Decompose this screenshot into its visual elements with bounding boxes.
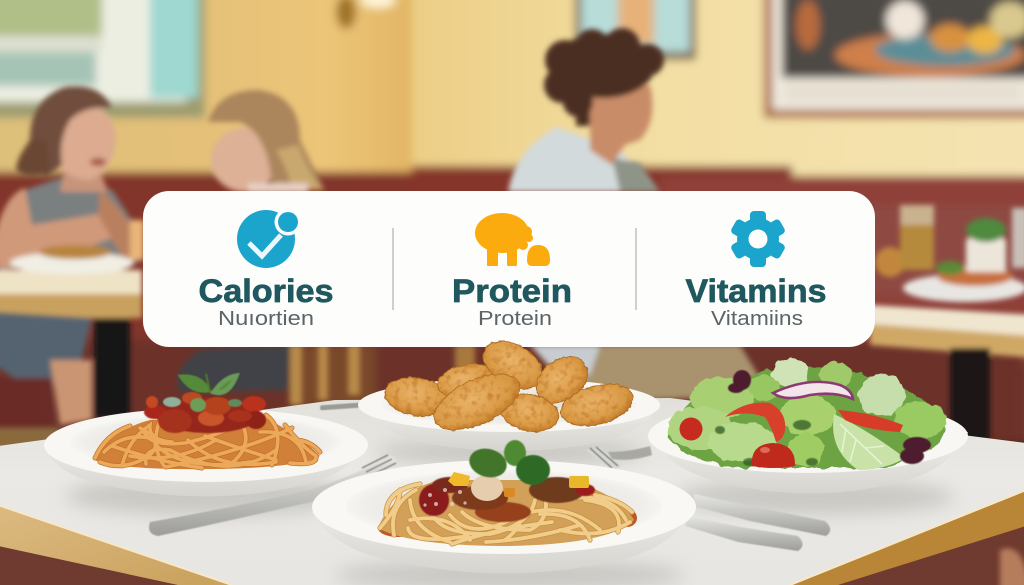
plate: spaghetti front	[312, 440, 696, 574]
heading: protein: Protein	[452, 273, 572, 309]
radicchio	[728, 370, 931, 464]
spaghetti mound	[94, 415, 320, 469]
large painting	[764, 0, 1024, 118]
background child left	[0, 178, 140, 270]
soft shadows under plates	[65, 438, 955, 585]
nugget	[528, 348, 596, 412]
pale lettuce leaf	[833, 414, 905, 470]
plate: green salad	[648, 358, 968, 494]
under panel left table	[0, 270, 142, 296]
nugget	[382, 373, 452, 421]
wainscot	[0, 172, 412, 372]
foreground boy	[508, 127, 660, 192]
label: protein: Protein	[478, 307, 552, 330]
cherry tomatoes	[680, 418, 702, 440]
nugget	[434, 358, 496, 402]
column: vitamins	[686, 211, 826, 330]
label: nutrient: Nuıortien	[218, 307, 314, 330]
nugget	[475, 332, 551, 398]
background child middle	[211, 128, 277, 192]
red onion ring	[773, 382, 853, 399]
tomato sauce	[144, 392, 266, 433]
icon: calories check circle	[237, 208, 302, 268]
window	[0, 0, 205, 118]
salad greens	[668, 358, 947, 468]
basil garnish	[466, 440, 550, 485]
chickpea and yellow pepper	[471, 475, 503, 501]
right fork	[585, 447, 622, 470]
white specks	[423, 488, 467, 507]
right spoon	[685, 516, 802, 551]
right table	[870, 322, 1024, 358]
icon: orange pig and egg	[475, 213, 550, 266]
column: protein	[452, 213, 572, 330]
right knife	[694, 494, 830, 536]
plate: spaghetti left	[44, 374, 368, 496]
icon: gear	[730, 211, 786, 267]
label: vitamins: Vitamiins	[711, 307, 803, 330]
nugget	[498, 390, 562, 436]
cutlery	[149, 446, 830, 551]
plate: chicken nuggets	[358, 332, 660, 451]
nugget	[426, 363, 528, 441]
child 2 lower body	[178, 345, 290, 392]
wall lamp	[336, 0, 356, 29]
basil garnish	[163, 374, 242, 412]
divider left	[392, 228, 394, 310]
sauce pools	[378, 509, 637, 537]
dark gaps between leaves	[715, 420, 818, 466]
left fork	[149, 456, 398, 536]
spaghetti mound	[378, 480, 634, 546]
foreground table	[0, 398, 1024, 585]
seated child lower body	[0, 312, 92, 385]
boy lower body	[530, 345, 770, 400]
nugget	[556, 377, 638, 433]
info panel	[143, 191, 875, 347]
heading: calories: Calories	[198, 273, 334, 309]
small painting	[575, 0, 696, 60]
column: calories	[198, 208, 334, 330]
divider right	[635, 228, 637, 310]
sauce	[419, 477, 595, 522]
tomato slices	[725, 403, 785, 442]
heading: vitamins: Vitamins	[686, 273, 826, 309]
